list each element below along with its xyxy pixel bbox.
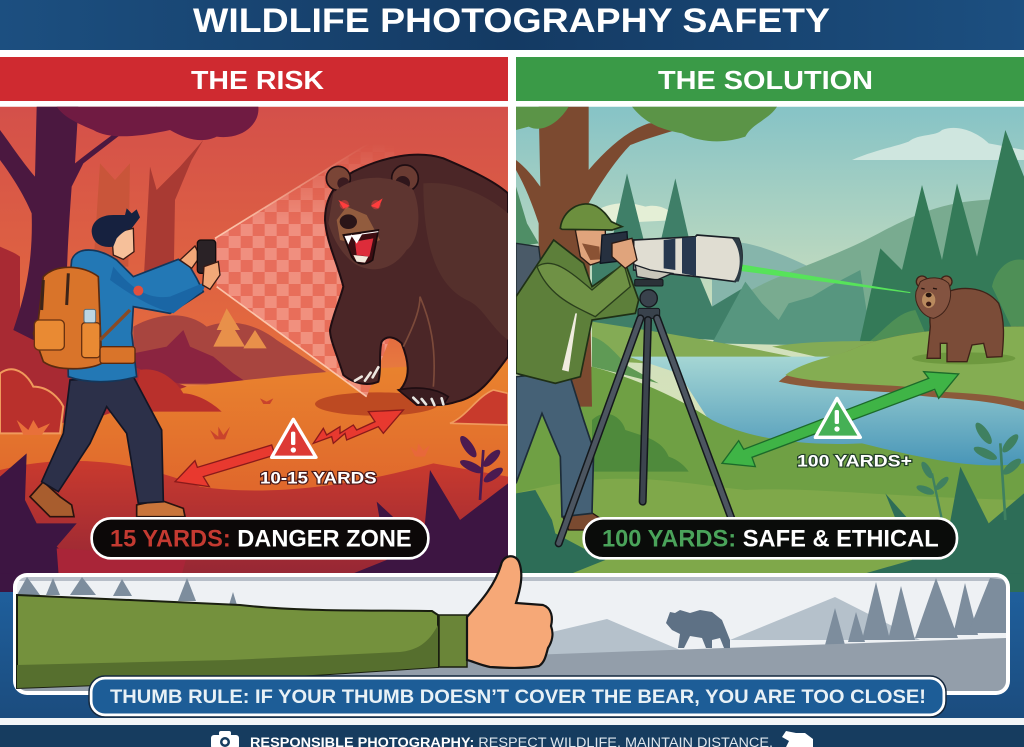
- leaf sprig: [460, 436, 503, 500]
- photographer: [516, 204, 742, 543]
- near meadow: [516, 366, 1024, 500]
- lower ground: [0, 461, 508, 573]
- danger pill: [92, 518, 428, 558]
- distant pines left: [17, 577, 237, 605]
- small pines: [712, 270, 872, 347]
- head and hair: [92, 208, 140, 259]
- boots: [30, 482, 185, 517]
- banner: the solution: [516, 57, 1024, 101]
- banner: the risk: THE RISK: [191, 65, 324, 95]
- banner: thumb rule: [89, 676, 946, 717]
- background trees: [94, 140, 203, 272]
- big tree: [516, 107, 777, 407]
- left bushes: [0, 246, 187, 423]
- head and cap: [560, 204, 622, 265]
- header: title bar: [0, 0, 1024, 50]
- clouds: [592, 128, 1024, 223]
- blue jacket: [67, 250, 203, 382]
- hand with thumb up: [467, 556, 552, 668]
- panel strip below scenes: [0, 592, 1024, 718]
- meadow bushes: [592, 337, 689, 472]
- angry bear: [325, 155, 508, 405]
- backpack: [516, 243, 542, 333]
- header: title bar: WILDLIFE PHOTOGRAPHY SAFETY: [193, 2, 830, 40]
- tripod: [559, 279, 732, 543]
- phone view cone: [214, 150, 392, 398]
- banner: thumb rule: THUMB RULE: IF YOUR THUMB DOESN’T COVER THE BEAR, YOU ARE TOO CLOSE!: [110, 686, 926, 708]
- card: thumb rule scene: [13, 556, 1010, 695]
- foreground foliage: [0, 453, 508, 593]
- trousers: [42, 377, 163, 503]
- tree canopy: [57, 107, 258, 140]
- arm in green sleeve: [17, 595, 467, 688]
- main dark tree: [0, 107, 157, 340]
- distance arrow: [722, 372, 959, 467]
- footer: [0, 718, 1024, 747]
- distance arrow: [175, 410, 403, 487]
- danger pill: 15 YARDS: DANGER ZONE: [110, 526, 412, 553]
- safe triangle: [815, 398, 860, 437]
- ground: [0, 364, 508, 490]
- panel: the solution scene: [516, 107, 1024, 593]
- warning triangle: [272, 419, 316, 457]
- river: [629, 357, 1024, 477]
- banner: the solution: THE SOLUTION: [658, 65, 873, 95]
- pine forest right: [825, 578, 1006, 645]
- bear shadow: [315, 392, 438, 416]
- far hills and pines: [133, 308, 337, 387]
- green sight line: [742, 265, 910, 293]
- green jacket: [516, 240, 639, 383]
- boot: [562, 511, 600, 530]
- left mid forest: [592, 174, 742, 340]
- small calm bear: [912, 276, 1015, 364]
- bear silhouette: [666, 610, 730, 648]
- foreground foliage: [516, 467, 1024, 593]
- grass tufts: [17, 398, 430, 457]
- orange backpack: [33, 267, 135, 369]
- ground: [17, 638, 1006, 691]
- leaf sprigs: [915, 420, 1023, 520]
- foreground bush by bear: [870, 260, 1024, 342]
- right forest: [859, 130, 1024, 353]
- icon: camera: [211, 731, 239, 747]
- safe pill: 100 YARDS: SAFE & ETHICAL: [602, 526, 939, 553]
- mountains: [540, 597, 920, 660]
- panel: the risk scene: [0, 107, 508, 593]
- distance label: 10-15 YARDS: [260, 468, 377, 487]
- hiker with backpack: [30, 208, 220, 517]
- distant hills: [712, 200, 990, 320]
- mid bushes: [0, 369, 508, 433]
- camera with telephoto lens: [600, 232, 742, 282]
- far meadow: [592, 322, 792, 363]
- red ground corner: [56, 548, 186, 573]
- hands and phone: [180, 240, 220, 289]
- icon: bear: [782, 731, 813, 747]
- trousers: [516, 372, 594, 517]
- distance label: 100 YARDS+: [797, 452, 912, 471]
- bank with island: [779, 327, 1024, 410]
- safe pill: [584, 518, 957, 558]
- banner: the risk: [0, 57, 508, 101]
